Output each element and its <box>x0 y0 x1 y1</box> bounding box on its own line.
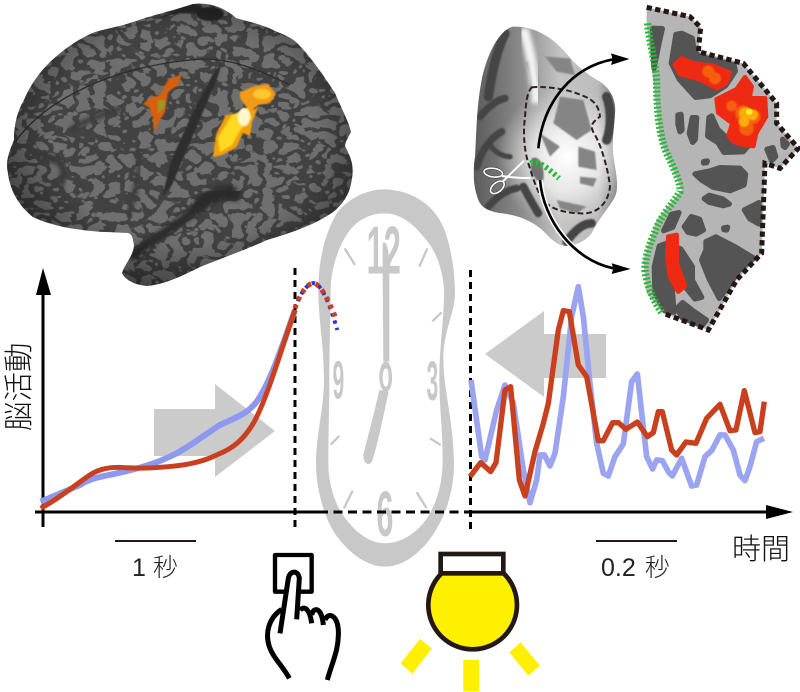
red dotted extrapolation <box>295 283 336 318</box>
blue trace after stimulus <box>471 287 764 503</box>
vertical axis with arrow <box>36 268 51 527</box>
blue dotted extrapolation <box>295 283 337 330</box>
grey arrow pointing left <box>485 311 606 397</box>
region of interest outline <box>524 87 610 213</box>
movement onset dashed line <box>294 268 296 527</box>
scale bar: 0.2 second: 0.2 秒 <box>601 554 670 582</box>
distorted clock <box>316 189 455 567</box>
icon: light bulb with rays <box>401 554 540 691</box>
clock numeral 12: 12 <box>367 214 401 289</box>
vertical axis label: 脳活動 <box>3 342 36 431</box>
horizontal axis label: 時間 <box>732 534 790 566</box>
horizontal axis with arrow <box>35 505 793 519</box>
dashed outline of flat map <box>647 7 798 330</box>
stimulus onset dashed line <box>469 270 472 531</box>
scale bar: 0.2 second <box>596 541 677 582</box>
clock numeral 9: 9 <box>333 350 344 410</box>
activation: parietal area, yellow <box>213 84 276 157</box>
flattened cortical map <box>643 7 798 330</box>
green cut edge <box>645 23 680 313</box>
blue trace before movement <box>41 310 295 502</box>
clock ticks <box>331 248 442 508</box>
cutting arc arrows <box>538 53 631 274</box>
scale bar: 1 second <box>115 541 196 582</box>
scale bar: 1 second: 1 秒 <box>132 554 178 582</box>
green cut line on hemisphere <box>531 162 559 178</box>
red trace after stimulus <box>470 311 764 496</box>
clock numeral 6: 6 <box>376 477 393 550</box>
chart: activity after stimulus <box>470 287 764 503</box>
inflated brain, lateral view <box>7 4 353 286</box>
activation: motor area, orange <box>143 74 182 134</box>
grey arrow pointing right <box>154 384 275 477</box>
icon: scissors <box>483 161 531 196</box>
activation clusters on flat map <box>667 58 766 292</box>
red trace before movement <box>41 310 295 508</box>
clock hands <box>363 243 392 464</box>
icon: finger pressing button <box>268 555 338 680</box>
inflated hemisphere, medial view with scissors <box>470 23 631 274</box>
clock numeral 3: 3 <box>427 350 438 412</box>
chart: activity before movement <box>41 283 337 508</box>
